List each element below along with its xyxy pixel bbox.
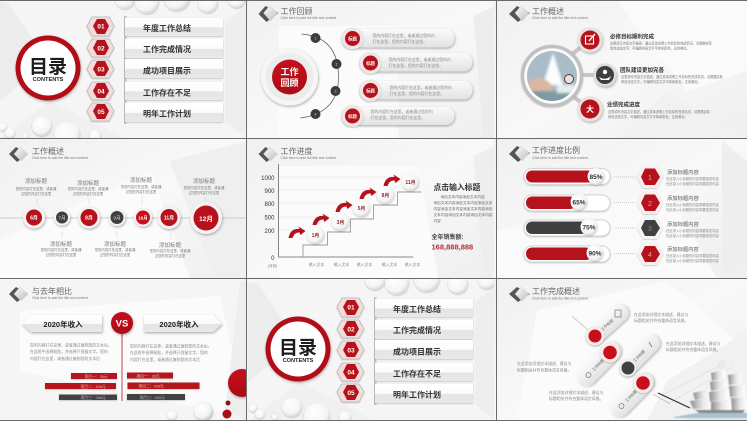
- contents spine: [374, 297, 376, 405]
- overview text 3: 这里填写内容文字描述。通过具体说明工作目标的完成情况，请根据实际: [608, 109, 711, 114]
- review item 1: 您的内容打在这里，或者通过您的内: [372, 33, 435, 38]
- left paragraph: [30, 342, 112, 361]
- contents badge: [266, 316, 330, 382]
- slide header: Click here to add the title text content: [32, 296, 88, 300]
- left bars: 项目二：428元: [80, 384, 106, 389]
- contents item 01: [87, 17, 223, 36]
- month 9: 9月: [113, 216, 121, 222]
- connector arrows: [614, 177, 635, 254]
- slide 8: table of contents repeat: [247, 266, 501, 421]
- slide header: 工作完成概述: [532, 286, 580, 296]
- month 11: [158, 206, 180, 229]
- hexagon item 3: 在此录入小标题的内容简要描述内容: [666, 233, 719, 238]
- contents item 03: 03: [97, 66, 105, 74]
- step 4 arrow and bubble: [360, 186, 394, 204]
- label above 6: [16, 177, 57, 205]
- hexagon item 1: 1: [648, 175, 652, 182]
- slide header: Click here to add the title text content: [532, 296, 588, 300]
- contents item 05: 明年工作计划: [143, 108, 191, 118]
- capsule 4: 工作标题: [624, 389, 638, 403]
- slide 2: work review: [246, 1, 475, 137]
- hexagon item 3: 在此录入小标题的内容简要描述内容: [666, 228, 719, 233]
- label above 8: 您的内容打在这里，或者通: [68, 186, 109, 191]
- arc with nodes: [300, 33, 342, 119]
- contents item 04: [87, 82, 223, 100]
- contents item 03: 03: [347, 348, 355, 354]
- label above 8: [68, 179, 109, 204]
- photo hub: [522, 46, 582, 106]
- contents badge: CONTENTS: [283, 358, 314, 364]
- contents item 04: 工作存在不足: [143, 88, 191, 98]
- note 2: 在此添加详细文本描述，建议与: [666, 341, 721, 346]
- arc with nodes: 2: [336, 62, 338, 66]
- slide header: [9, 286, 88, 302]
- slide header: [258, 146, 336, 162]
- hexagon item 2: [637, 192, 719, 214]
- note 4: 标题相关并符合整体语言风格。: [549, 396, 603, 401]
- capsule 1: [582, 301, 632, 349]
- contents item 01: 年度工作总结: [393, 304, 441, 314]
- step 5 arrow and bubble: 11月: [405, 180, 416, 186]
- timeline axis: [0, 218, 246, 219]
- capsule 3: [615, 332, 663, 380]
- contents item 02: [87, 39, 223, 58]
- decorative balls: [249, 266, 496, 421]
- review item 2: [360, 52, 472, 74]
- hexagon item 4: [637, 243, 719, 265]
- hexagon item 3: 3: [648, 226, 652, 233]
- contents item 02: 02: [347, 326, 355, 334]
- left paragraph: 内容打在这里，或者通过复制您的文本后: [30, 356, 100, 361]
- left banner: 2020年收入: [43, 319, 83, 329]
- bar 65%: [524, 194, 610, 211]
- slide header: Click here to add the title text content: [32, 156, 88, 160]
- month 7: [54, 210, 70, 226]
- contents item 02: 工作完成情况: [143, 44, 191, 54]
- right bars: 项目一：36元: [136, 374, 160, 378]
- slide header: Click here to add the title text content: [280, 16, 336, 20]
- sales total: [432, 233, 473, 252]
- left bars: [45, 373, 117, 400]
- side text block: 内容添加文本内容添加文本内容添加: [434, 206, 493, 211]
- overview text 2: 修改这段文字。可编辑内容文字字体和颜色，达到美化。: [621, 79, 701, 84]
- month 7: 7月: [58, 216, 66, 222]
- side text block: 内容: [434, 218, 441, 223]
- review item 3: 打在这里，您的内容打在这里。: [390, 91, 444, 96]
- review item 1: 标题: [348, 36, 357, 42]
- contents item 01: 01: [97, 24, 105, 30]
- hexagon item 2: 在此录入小标题的内容简要描述内容: [666, 202, 719, 207]
- label below 11: 添加标题: [159, 241, 181, 249]
- overview text 1: 修改这段文字。可编辑内容文字字体和颜色，达到美化。: [610, 46, 690, 50]
- review item 3: 标题: [366, 88, 375, 94]
- label below 7: [41, 231, 82, 257]
- slide header: 与去年相比: [32, 286, 72, 296]
- contents item 05: 05: [97, 109, 105, 116]
- contents item 02: 02: [97, 46, 105, 52]
- hexagon item 1: [637, 166, 719, 188]
- overview text 2: 这里填写内容文字描述。通过具体说明工作目标的完成情况，请根据实际: [621, 74, 724, 79]
- central circle: 工作: [280, 66, 299, 77]
- month 6: 6月: [30, 216, 38, 222]
- right paragraph: 内容打在这里，或者通过复制您的文本后: [130, 357, 200, 362]
- bar 90%: [524, 244, 610, 262]
- center divider: [121, 331, 123, 401]
- bar 75%: 75%: [582, 224, 596, 232]
- step 3 arrow and bubble: [336, 199, 370, 217]
- contents item 01: 01: [347, 304, 355, 312]
- label above 12: [184, 177, 225, 201]
- hexagon item 4: 添加标题内容: [667, 245, 699, 253]
- side text block: 添加文本内容添加文本内容添加文本: [434, 200, 493, 205]
- contents item 03: 成功项目展示: [393, 346, 441, 356]
- contents item 01: 年度工作总结: [143, 23, 191, 33]
- label below 11: 您的内容打在这里，或者通: [150, 248, 191, 253]
- side text block: 点击输入标题: [434, 182, 480, 192]
- right paragraph: 在此框中选择粘贴，并选择只保留文字。您的: [130, 350, 208, 355]
- step 1 arrow and bubble: 1月: [312, 233, 319, 239]
- month 6: [23, 206, 45, 228]
- review item 3: 您的内容打在这里，或者通过您的内: [390, 85, 452, 90]
- side text block: 文本内容添加文本内容添加文本内容: [434, 212, 493, 217]
- hexagon item 4: 在此录入小标题的内容简要描述内容: [666, 258, 719, 263]
- icon node: progress: 大: [586, 104, 594, 114]
- slide header: [9, 146, 88, 162]
- staircase chart: 输入文本: [382, 262, 397, 267]
- note 2: 标题相关并符合整体语言风格。: [666, 347, 720, 352]
- hexagon item 1: 在此录入小标题的内容简要描述内容: [666, 181, 719, 186]
- left paragraph: 您的内容打在这里，或者通过复制您的文本后，: [30, 342, 112, 348]
- contents item 05: 明年工作计划: [393, 390, 441, 400]
- right bars: 项目二：428元: [138, 384, 164, 388]
- contents item 03: [337, 340, 473, 359]
- capsule 3: 工作标题: [632, 349, 646, 363]
- slide header: 工作概述: [532, 6, 564, 16]
- icon node: team: [594, 64, 616, 86]
- arc with nodes: 3: [335, 90, 337, 94]
- hexagon item 2: 在此录入小标题的内容简要描述内容: [666, 207, 719, 212]
- slide 7: year on year comparison: [0, 278, 256, 421]
- icon node: edit: [578, 28, 602, 52]
- staircase chart: 0: [271, 256, 275, 262]
- label below 9: 添加标题: [104, 240, 126, 248]
- left bars: 项目一：36元: [84, 374, 108, 379]
- month 12: [190, 202, 222, 234]
- contents spine: [124, 16, 126, 124]
- right bars: 项目三：440元: [139, 395, 165, 400]
- contents item 05: 05: [347, 390, 355, 397]
- decorative balls: [0, 0, 246, 148]
- note 4: 在此添加详细文本描述，建议与: [549, 390, 604, 395]
- step 5 arrow and bubble: [384, 173, 420, 191]
- month 8: 8月: [85, 216, 93, 222]
- slide header: Click here to add the title text content: [280, 156, 336, 160]
- label above 12: 过您的内容打在这里: [189, 190, 220, 195]
- label below 11: 过您的内容打在这里: [155, 253, 186, 258]
- review item 4: [342, 105, 454, 127]
- review item 2: 打在这里，您的内容打在这里。: [388, 63, 443, 68]
- contents item 01: [337, 298, 473, 317]
- decorative balls: [167, 369, 256, 420]
- right banner: [144, 315, 222, 332]
- overview text 2: [620, 66, 724, 84]
- label above 6: 您的内容打在这里，或者通: [16, 186, 57, 191]
- capsule 2: 工作标题: [591, 358, 605, 372]
- slide header: [509, 6, 588, 22]
- note 1: 标题相关并符合整体语言风格。: [634, 318, 688, 323]
- label below 9: 过您的内容打在这里: [100, 252, 131, 257]
- hexagon item 2: 2: [648, 201, 652, 208]
- month 9: [108, 209, 126, 226]
- label above 10: 过您的内容打在这里: [126, 189, 157, 194]
- sales total: 168,888,888: [432, 242, 473, 252]
- contents item 04: [337, 363, 473, 381]
- note 1: [634, 312, 689, 323]
- step 4 arrow and bubble: 8月: [382, 193, 389, 199]
- month 10: 10月: [138, 216, 148, 222]
- contents item 03: 成功项目展示: [143, 66, 191, 76]
- overview text 3: 业绩完成进度: [607, 100, 641, 108]
- staircase chart: 800: [264, 202, 275, 208]
- review item 1: 打在这里，您的内容打在这里。: [372, 39, 427, 44]
- left bars: 项目三：268元: [80, 395, 106, 400]
- slide header: 工作回顾: [280, 6, 312, 16]
- slide header: 工作概述: [32, 146, 64, 156]
- right banner: 2020年收入: [159, 319, 199, 329]
- overview text 1: 必修目标顺利完成: [610, 32, 655, 40]
- staircase chart: 输入文本: [405, 262, 420, 267]
- contents badge: [16, 36, 80, 100]
- label above 6: 添加标题: [25, 177, 47, 185]
- overview text 1: [610, 32, 713, 50]
- label above 8: 添加标题: [77, 179, 99, 187]
- right bars: [127, 372, 200, 400]
- capsule 1: 工作标题: [600, 318, 614, 332]
- note 2: [666, 341, 721, 352]
- review item 4: 打在这里，您的内容打在这里。: [370, 115, 425, 120]
- contents item 02: [337, 320, 473, 339]
- staircase chart: [261, 164, 422, 268]
- central circle: 回顾: [280, 78, 299, 88]
- month 10: [134, 208, 152, 226]
- bar 85%: 85%: [589, 174, 603, 181]
- left paragraph: 在此框中选择粘贴，并选择只保留文字。您的: [30, 349, 108, 354]
- note 1: 在此添加详细文本描述，建议与: [634, 312, 689, 317]
- review item 4: 标题: [348, 113, 357, 120]
- side text block: [434, 182, 493, 223]
- hexagon item 3: [637, 217, 719, 239]
- overview text 3: 修改这段文字。可编辑内容文字字体和颜色，达到美化。: [608, 114, 688, 119]
- side text block: 添加文本内容添加文本内容: [440, 194, 485, 199]
- bar 85%: [524, 168, 610, 185]
- hexagon item 4: 4: [648, 252, 652, 259]
- review item 2: 标题: [366, 60, 375, 67]
- contents item 04: 04: [97, 88, 105, 96]
- slide header: 工作进度比例: [532, 145, 580, 155]
- contents badge: CONTENTS: [33, 77, 64, 83]
- left banner: [22, 315, 102, 332]
- slide 9: work completion overview: [494, 278, 747, 421]
- label below 7: 添加标题: [50, 240, 72, 248]
- month 11: 11月: [164, 216, 174, 222]
- slide 6: work progress ratio: [494, 138, 747, 284]
- hexagon item 1: 在此录入小标题的内容简要描述内容: [666, 176, 719, 181]
- review item 2: 您的内容打在这里，或者通过您的内: [388, 57, 451, 62]
- right paragraph: 您的内容打在这里，或者通过复制您的文本后，: [130, 344, 212, 348]
- VS badge: VS: [116, 318, 128, 330]
- slide header: Click here to add the title text content: [532, 156, 588, 160]
- label below 9: [95, 231, 136, 257]
- contents item 05: [337, 384, 473, 403]
- label above 12: 添加标题: [193, 177, 215, 185]
- note 3: 在此添加详细文本描述，建议与: [517, 361, 572, 366]
- staircase chart: 输入文本: [309, 262, 324, 267]
- contents badge: 目录: [29, 56, 67, 78]
- label above 6: 过您的内容打在这里: [21, 191, 52, 196]
- step 1 arrow and bubble: [288, 226, 324, 244]
- staircase chart: 输入文本: [357, 262, 372, 267]
- note 3: [517, 361, 572, 372]
- slide 1: table of contents: [0, 0, 251, 148]
- central circle: [261, 48, 318, 106]
- month 12: 12月: [199, 215, 213, 223]
- VS badge: [111, 312, 133, 334]
- hexagon item 4: 在此录入小标题的内容简要描述内容: [666, 253, 719, 258]
- staircase chart: 输入文本: [334, 262, 349, 267]
- bar 90%: 90%: [588, 250, 602, 258]
- bar 65%: 65%: [572, 200, 586, 206]
- slide 4: monthly timeline: [0, 139, 246, 258]
- staircase chart: (月份): [268, 263, 277, 268]
- contents item 03: [87, 59, 223, 78]
- hexagon item 3: 添加标题内容: [667, 220, 699, 228]
- right paragraph: [130, 344, 212, 362]
- contents item 02: 工作完成情况: [393, 325, 441, 335]
- note 4: [549, 390, 604, 401]
- label below 7: 过您的内容打在这里: [46, 252, 77, 257]
- sales total: 全年销售额:: [432, 233, 464, 241]
- staircase chart: 200: [264, 229, 275, 235]
- connectors: [572, 46, 594, 104]
- slide header: 工作进度: [280, 146, 312, 156]
- slide header: Click here to add the title text content: [532, 16, 588, 20]
- review item 3: [360, 80, 472, 102]
- leader lines: [572, 316, 670, 404]
- slide header: [509, 286, 588, 302]
- label above 10: 添加标题: [130, 176, 152, 184]
- sailing ship illustration: [658, 359, 747, 421]
- overview text 2: 团队建设更加完善: [620, 66, 665, 74]
- label below 7: 您的内容打在这里，或者通: [41, 247, 82, 252]
- slide 5: work progress staircase chart: [246, 138, 500, 284]
- staircase chart: 1000: [261, 176, 275, 182]
- overview text 3: [607, 100, 711, 119]
- label above 10: 您的内容打在这里，或者通: [121, 184, 162, 189]
- contents item 05: [87, 103, 223, 122]
- arc with nodes: 1: [315, 36, 317, 40]
- contents item 04: 工作存在不足: [393, 368, 441, 378]
- step 3 arrow and bubble: 5月: [358, 206, 365, 212]
- capsule 2: [573, 338, 625, 390]
- contents item 04: 04: [347, 370, 355, 376]
- slide header: [258, 6, 336, 22]
- overview text 1: 这里填写内容文字描述。通过具体说明工作目标的完成情况，请根据实际: [610, 40, 713, 46]
- slide header: [509, 145, 588, 162]
- step 2 arrow and bubble: 3月: [337, 220, 344, 226]
- hexagon item 2: 添加标题内容: [667, 194, 699, 202]
- note 3: 标题相关并符合整体语言风格。: [517, 368, 571, 372]
- staircase chart: 900: [264, 189, 275, 195]
- hexagon item 1: 添加标题内容: [667, 168, 699, 176]
- step 2 arrow and bubble: [312, 213, 350, 231]
- label above 10: [121, 176, 162, 204]
- icon node: progress: [578, 96, 602, 122]
- staircase chart: 500: [264, 216, 275, 222]
- arc with nodes: 4: [315, 112, 317, 116]
- label above 8: 过您的内容打在这里: [73, 191, 104, 196]
- review item 1: [342, 28, 454, 50]
- label above 12: 您的内容打在这里，或者通: [184, 185, 225, 190]
- label below 9: 您的内容打在这里，或者通: [95, 247, 136, 252]
- contents badge: 目录: [279, 337, 317, 359]
- review item 4: 您的内容打在这里，或者通过您的内: [370, 109, 433, 114]
- capsule 4: [606, 369, 658, 421]
- bar 75%: [524, 218, 610, 236]
- month 8: [78, 206, 100, 228]
- slide 3: work overview with photo hub: [494, 6, 723, 138]
- label below 11: [150, 232, 191, 258]
